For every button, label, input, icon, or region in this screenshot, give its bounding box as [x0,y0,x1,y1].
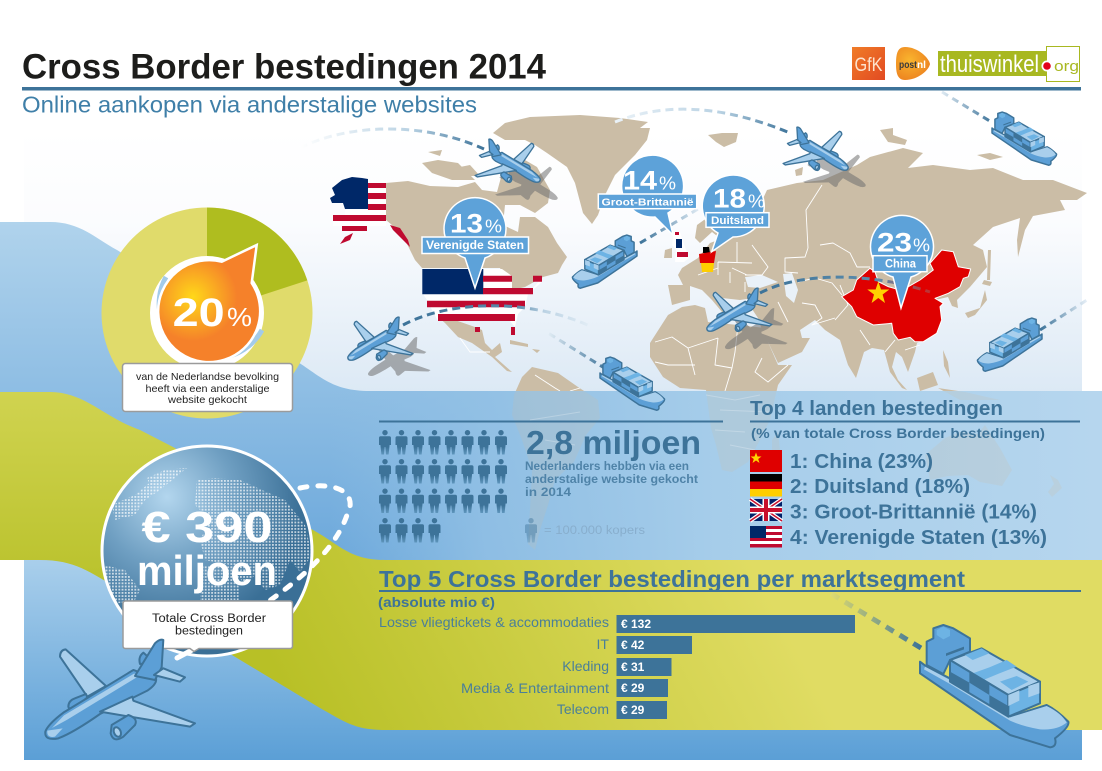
flag: Germany map [699,247,716,272]
dashed route: to plane 2 [615,109,790,133]
faint map under panels [512,391,1062,550]
description: in 2014 [525,487,572,499]
bubble: China 23%: China [885,259,917,271]
faint map borders under panel [530,395,770,470]
flag: United States [750,526,782,548]
dashed route: to plane 1 [300,129,484,149]
bar: Kleding [562,658,672,676]
ship left [572,235,637,288]
bar: Media & Entertainment: Media & Entertainment [461,680,609,696]
logo: thuiswinkel.org: org [1054,58,1079,75]
bar: vliegtickets: Losse vliegtickets & accommodaties [379,614,609,630]
dashed route: to big ship [830,593,921,648]
label: Groot-Brittannië: 3: Groot-Brittannië (14%) [790,500,1037,524]
people icons [379,430,507,542]
plane lower left shadow [368,337,431,376]
heading: Top 4 landen bestedingen [750,397,1003,420]
bar: Telecom: Telecom [557,701,609,717]
bubble: Verenigde Staten 13% [422,198,528,288]
bar: Telecom [557,701,667,719]
dashed route around globe [262,486,350,606]
dashed route: to top right ship [942,92,993,123]
label: China: 1: China (23%) [790,450,933,473]
globe dotted continents [103,468,312,605]
caption box: totale bestedingen: Totale Cross Border [152,613,266,625]
donut chart: 20%: % [227,302,252,332]
background: blue wave band [0,222,1102,560]
bar: IT: IT [597,636,609,652]
bar: Kleding: € 31 [621,660,645,674]
logo: GfK [852,47,885,80]
bubble: Verenigde Staten 13%: Verenigde Staten [426,240,524,252]
dashed route: plane 3 to China [760,277,930,293]
logo: GfK: GfK [854,55,883,76]
panel: top 5 market segments [378,566,1081,719]
bubble: Duitsland 18% [702,175,769,252]
panel: 2,8 miljoen [379,420,723,542]
description: anderstalige website gekocht [525,474,698,486]
dashed route: bottom ship [548,333,606,369]
caption box: 20% [122,364,292,412]
panel: top 4 countries overlay [330,391,1102,560]
caption box: 20%: van de Nederlandse bevolking [136,371,279,383]
flag: China map [842,250,971,342]
bar: Telecom: € 29 [621,703,645,717]
label: Duitsland: 2: Duitsland (18%) [790,475,970,498]
figure: miljoen: miljoen [137,547,277,594]
caption box: 20%: website gekocht [167,394,247,406]
logo: thuiswinkel.org: thuiswinkel [940,51,1039,78]
bar: Kleding: Kleding [562,658,609,674]
background: lower blue panel [24,555,1082,760]
heading: Top 5 Cross Border bestedingen per marktsegment [379,566,965,592]
caption box: 20%: heeft via een anderstalige [146,383,270,395]
subtitle: Online aankopen via anderstalige websites [22,92,477,118]
icon: star [867,282,889,303]
dashed route: left ship to Britain [640,209,698,243]
background: green wave right [207,467,1102,730]
dashed route: lower left plane across America [403,306,592,327]
flag: China [750,450,782,472]
big plane [45,640,195,739]
panel: top 4 landen [750,397,1080,549]
bubble: Duitsland 18%: 18 [713,184,746,214]
description [525,461,698,499]
bar chart [379,614,855,719]
bar: Media & Entertainment: € 29 [621,681,645,695]
progress arc [159,277,262,358]
figure: € 390: € 390 [142,503,272,552]
logo: PostNL: post [899,59,917,71]
world map [386,115,1087,391]
subheading: (% van totale Cross Border bestedingen) [751,426,1045,441]
ship lower right [977,318,1042,371]
logo: PostNL [896,47,930,80]
caption box: totale bestedingen [123,601,292,658]
dashed route: lower right ship [1040,300,1087,330]
flag: United States map [422,269,542,335]
plane 2 [783,127,848,170]
big container ship [920,625,1068,747]
flag: Alaska [330,177,410,247]
logos [852,46,1080,82]
orange speech bubble [158,245,260,362]
donut slice 20% [207,208,307,313]
globe [102,446,350,656]
bubble: Groot-Brittannië 14%: % [659,173,676,193]
subheading: (absolute mio €) [378,594,495,610]
map country borders [460,185,920,391]
label: Verenigde Staten: 4: Verenigde Staten (13%) [790,526,1047,549]
bar: IT: € 42 [621,638,645,652]
bubble: China 23%: % [913,236,930,256]
flag: United Kingdom map [672,232,689,262]
ship bottom middle [600,357,665,410]
ship top right [992,112,1057,165]
title: Cross Border bestedingen 2014 [22,48,547,86]
bubble: China 23%: 23 [877,228,912,258]
bubble: Verenigde Staten 13%: 13 [450,209,483,239]
plane 3 [707,288,772,331]
legend: person equals 100.000 kopers [525,518,645,542]
bubble: Groot-Brittannië 14% [598,155,697,235]
bar: Media & Entertainment [461,679,668,697]
description: Nederlanders hebben via een [525,461,689,473]
plane 2 shadow [803,151,866,187]
headline number: 2,8 miljoen [526,424,701,461]
bubble: China 23% [871,215,934,308]
background: sky gradient panel [24,130,1082,392]
bar: IT [597,636,692,654]
plane 3 shadow [725,308,788,349]
bar: vliegtickets: € 132 [621,617,651,631]
bubble: Groot-Brittannië 14%: Groot-Brittannië [602,196,694,208]
logo: thuiswinkel.org [938,46,1080,82]
legend: person equals 100.000 kopers: = 100.000 kopers [544,525,645,537]
caption box: totale bestedingen: bestedingen [175,626,243,638]
bubble: Verenigde Staten 13%: % [485,217,502,237]
plane 1 shadow [495,163,558,200]
background: green wave left [0,392,207,640]
donut chart: 20%: 20 [173,291,225,335]
plane 1 [475,139,540,182]
flag: United Kingdom [750,499,782,521]
bubble: Groot-Brittannië 14%: 14 [623,165,657,195]
bubble: Duitsland 18%: Duitsland [711,215,764,227]
donut chart: 20% [102,208,312,418]
flag: Germany [750,474,782,496]
plane lower left [348,317,413,360]
bubble: Duitsland 18%: % [748,192,765,212]
logo: PostNL: nl [917,59,926,71]
bar: vliegtickets [379,614,855,633]
title rule [22,87,1081,90]
